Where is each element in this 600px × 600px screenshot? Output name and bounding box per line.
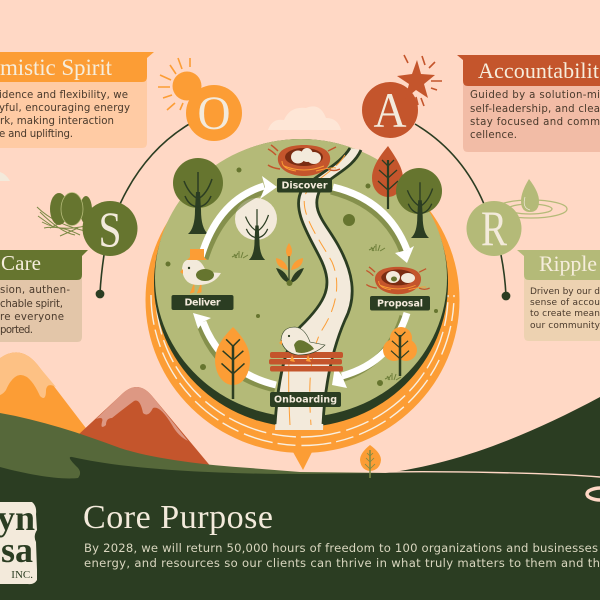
label: proposal xyxy=(370,296,430,310)
body text xyxy=(470,90,600,141)
tree: orange left xyxy=(215,327,250,399)
panel: optimistic spirit xyxy=(0,52,154,148)
body text: our community xyxy=(530,321,600,331)
icon: S circle: S xyxy=(98,201,122,257)
body text: yful, encouraging energy xyxy=(0,103,130,114)
core purpose text: energy, and resources so our clients can thrive in what truly matters to them and th xyxy=(84,556,600,570)
icon: nest with eggs xyxy=(37,192,92,236)
panel body xyxy=(0,276,82,342)
icon: sun with O: O xyxy=(198,87,230,140)
hill and footer: dark green xyxy=(0,397,600,600)
tree: olive right xyxy=(396,168,442,238)
mountain: rust xyxy=(78,387,212,468)
icon: sun with O xyxy=(158,58,242,141)
label: deliver: Deliver xyxy=(184,298,221,308)
nest: discover xyxy=(268,145,340,176)
body text xyxy=(0,285,70,336)
icon: star with A xyxy=(362,55,442,138)
icon: star with A: A xyxy=(374,82,406,138)
body text: Guided by a solution-mi xyxy=(470,90,600,101)
body text: re everyone xyxy=(0,312,64,323)
body text: chable spirit, xyxy=(0,299,63,310)
grass tufts xyxy=(232,244,401,380)
body text: rk, making interaction xyxy=(0,116,114,127)
panel body xyxy=(0,78,147,148)
body text: e and uplifting. xyxy=(0,129,73,140)
small cloud left xyxy=(0,172,10,181)
panel: ripple xyxy=(517,250,600,341)
body text: sion, authen- xyxy=(0,285,70,296)
arrow: proposal to onboarding xyxy=(332,313,407,388)
heading: Care xyxy=(1,251,41,275)
icon: S circle xyxy=(82,201,138,257)
body text: sense of accou xyxy=(530,298,600,308)
banner xyxy=(517,250,600,280)
mountain: orange xyxy=(0,352,95,440)
body text: self-leadership, and clea xyxy=(470,104,600,115)
core purpose text xyxy=(84,541,600,570)
label: onboarding: Onboarding xyxy=(274,394,337,406)
nest: proposal xyxy=(366,267,430,294)
dots xyxy=(166,168,438,386)
body text: cellence. xyxy=(470,130,517,141)
ring dashes xyxy=(151,295,454,445)
arrow: deliver to discover xyxy=(201,176,277,259)
connecting arcs xyxy=(96,123,510,300)
hill: olive xyxy=(0,413,390,480)
heading: core purpose: Core Purpose xyxy=(83,499,273,536)
logo: INC. xyxy=(11,569,33,581)
panel body xyxy=(524,276,600,341)
arrow: discover to proposal xyxy=(331,187,414,263)
label: discover xyxy=(277,178,332,192)
tree: rust leaf xyxy=(372,146,403,209)
bird: on bench xyxy=(279,327,325,362)
body text: ported. xyxy=(0,325,33,336)
bird: deliver with hat xyxy=(180,249,221,293)
label: onboarding xyxy=(270,392,341,407)
icon: water drop with ripples xyxy=(495,179,567,218)
icon: small orange leaf xyxy=(360,445,381,478)
core purpose text: By 2028, we will return 50,000 hours of freedom to 100 organizations and businesses xyxy=(84,541,598,555)
body text xyxy=(530,287,600,331)
tree: cream xyxy=(235,198,277,260)
heading: mistic Spirit xyxy=(0,55,113,80)
body text: stay focused and comm xyxy=(470,117,600,128)
label: proposal: Proposal xyxy=(377,298,423,310)
body text xyxy=(0,90,130,140)
icon: R circle: R xyxy=(481,200,507,256)
tree: orange right xyxy=(383,327,417,376)
label: deliver xyxy=(172,295,234,310)
banner xyxy=(0,52,154,82)
banner xyxy=(0,250,88,280)
panel: care xyxy=(0,250,88,342)
arrow: onboarding to deliver xyxy=(193,313,276,389)
panel: accountability xyxy=(457,55,600,152)
cloud xyxy=(268,106,341,130)
tree: olive left xyxy=(173,158,223,234)
icon: R circle xyxy=(466,200,522,256)
bench xyxy=(269,352,343,372)
body text: Driven by our d xyxy=(530,287,600,297)
flower xyxy=(276,243,304,286)
central circle diagram xyxy=(146,139,460,470)
body text: idence and flexibility, we xyxy=(0,90,128,101)
dark rim xyxy=(154,139,448,427)
logo: sa xyxy=(1,530,33,570)
label: discover: Discover xyxy=(282,180,328,192)
banner xyxy=(457,55,600,86)
heading: Accountabilit xyxy=(478,58,599,83)
orange ring xyxy=(146,147,460,453)
green disc xyxy=(155,139,447,417)
body text: to create mean xyxy=(530,309,600,319)
road xyxy=(275,148,361,430)
panel body xyxy=(463,82,600,152)
thin peach line and loop xyxy=(385,472,600,500)
heading: Ripple xyxy=(539,251,597,276)
logo xyxy=(0,498,37,584)
ring tip xyxy=(293,452,312,470)
